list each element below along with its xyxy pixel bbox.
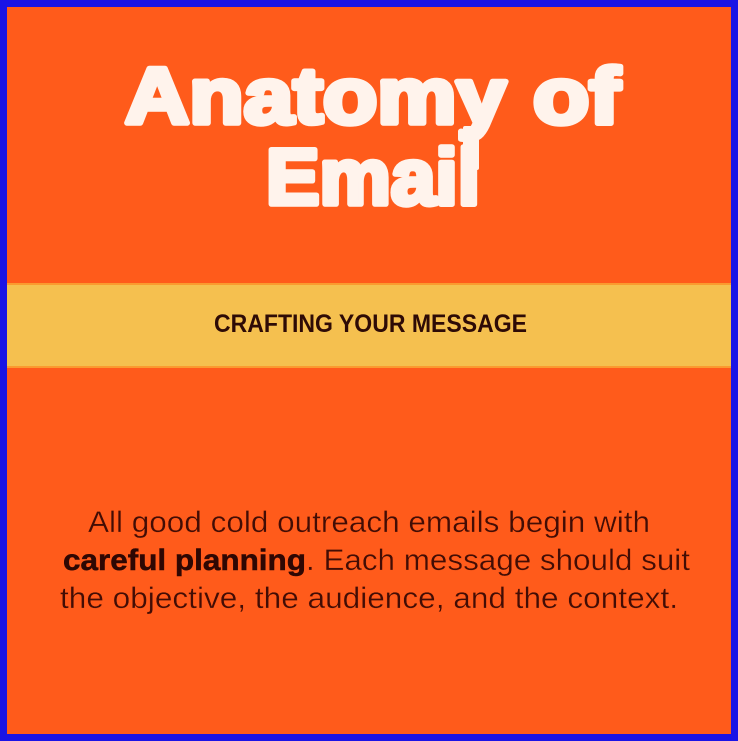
title: of [533, 51, 621, 140]
body text: careful planning [63, 544, 306, 577]
panel: subtitle banner [7, 283, 731, 368]
title: Email [266, 132, 480, 221]
body text: All good cold outreach emails begin with [88, 506, 650, 539]
body text [60, 506, 691, 615]
title: Anatomy [125, 51, 506, 140]
title [125, 51, 621, 221]
banner heading: CRAFTING YOUR MESSAGE [214, 310, 527, 338]
body text: the objective, the audience, and the context. [60, 582, 678, 615]
body text: . Each message should suit [306, 544, 691, 577]
